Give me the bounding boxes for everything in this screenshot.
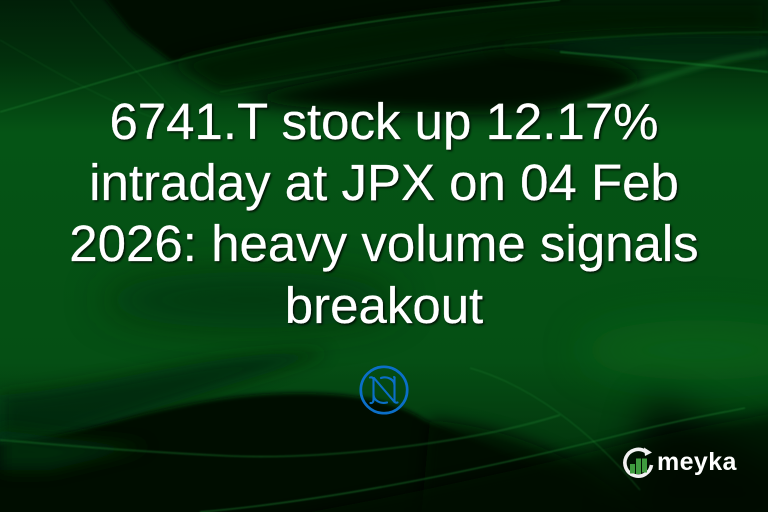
wordmark: meyka bbox=[657, 448, 737, 476]
top lines bbox=[0, 0, 560, 112]
logo: meyka bbox=[623, 448, 737, 478]
icon: meyka chart ring bbox=[623, 448, 654, 478]
bottom lines bbox=[0, 415, 560, 457]
title: breakout bbox=[285, 277, 483, 334]
title: 6741.T stock up 12.17% bbox=[109, 92, 659, 150]
title bbox=[69, 92, 700, 334]
title: intraday at JPX on 04 Feb bbox=[89, 154, 679, 211]
soft tonal patches bbox=[100, 272, 400, 328]
icon: NS monogram bbox=[359, 366, 409, 414]
title: 2026: heavy volume signals bbox=[69, 215, 699, 272]
top darkness bbox=[90, 0, 570, 62]
dark hump bbox=[0, 393, 640, 512]
lower-left dark sweep bbox=[0, 352, 330, 440]
